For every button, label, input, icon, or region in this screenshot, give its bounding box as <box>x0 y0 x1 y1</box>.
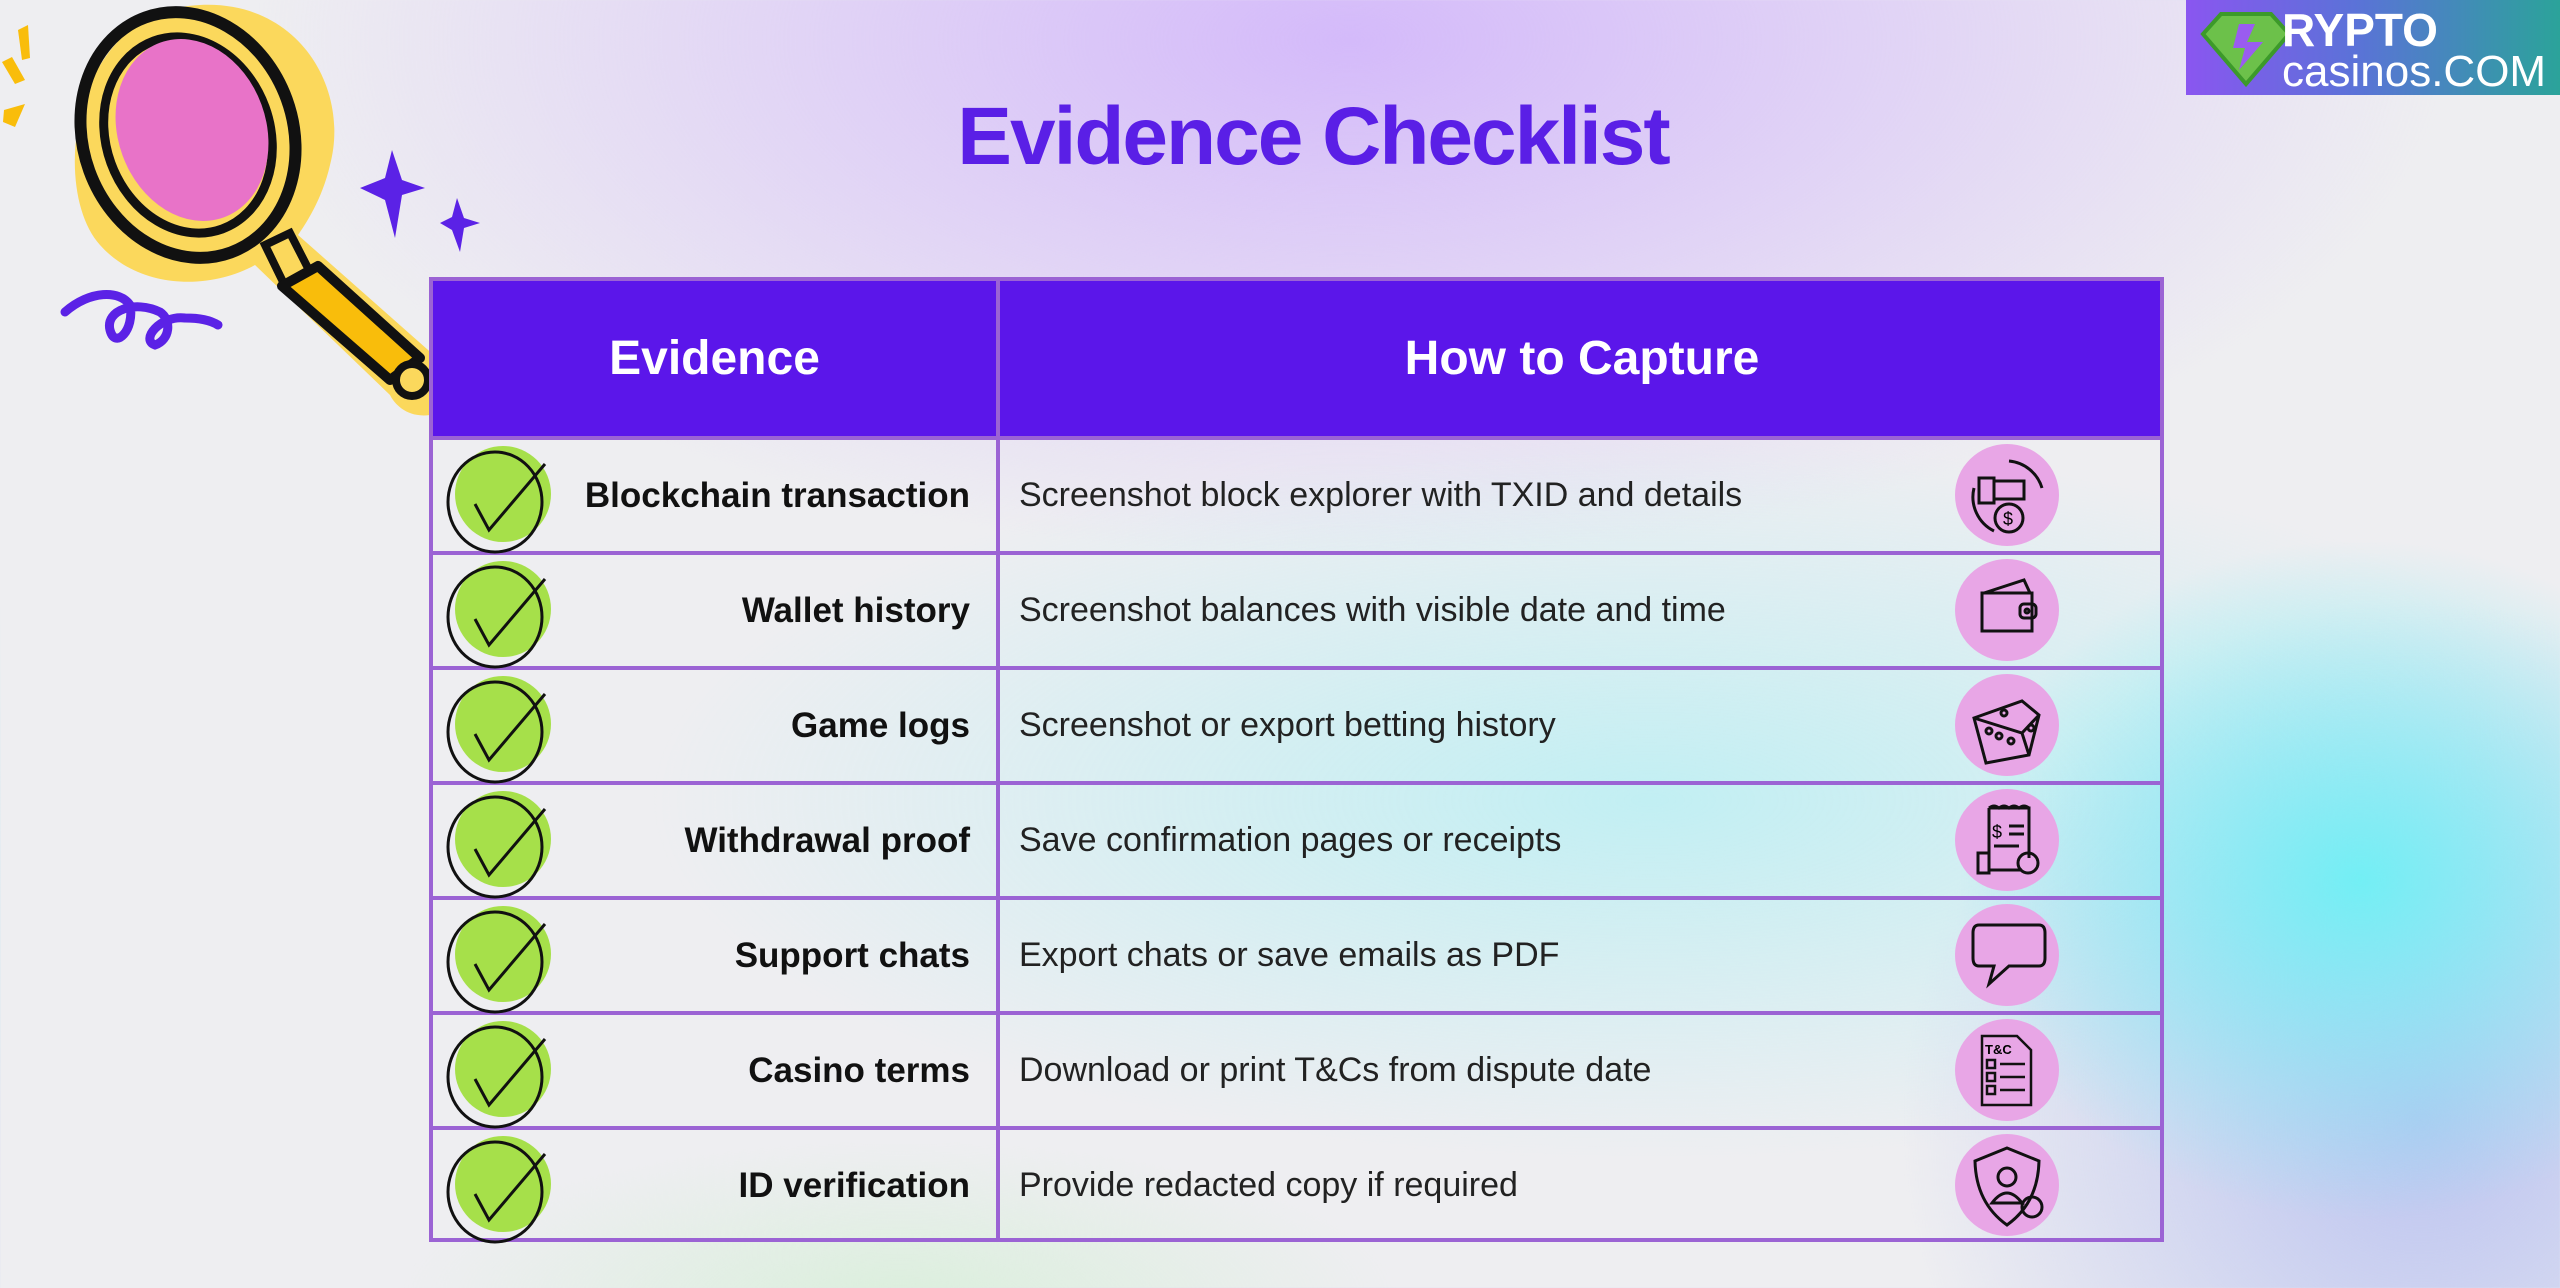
row: id verification <box>446 1134 2059 1244</box>
row: game logs <box>433 670 2160 785</box>
row: support chats: Export chats or save emails as PDF <box>1019 936 1559 974</box>
logo <box>2186 0 2560 95</box>
logo: casinos.COM <box>2282 47 2546 95</box>
row: support chats: Support chats <box>735 936 970 975</box>
row: blockchain: $ <box>2003 509 2013 529</box>
row: support chats <box>433 900 2160 1015</box>
decoration: squiggle <box>65 295 218 345</box>
row: wallet: Wallet history <box>742 591 970 630</box>
icon: logo diamond <box>2203 14 2289 84</box>
row: casino terms: Casino terms <box>748 1051 970 1090</box>
row: withdrawal: $ <box>1992 822 2002 842</box>
row: game logs: Screenshot or export betting history <box>1019 706 1556 744</box>
row: wallet: Screenshot balances with visible date and time <box>1019 591 1726 629</box>
row: blockchain: Screenshot block explorer with TXID and details <box>1019 476 1742 514</box>
illustration: magnifying glass <box>2 4 480 416</box>
row: blockchain: Blockchain transaction <box>585 476 970 515</box>
row: id verification: ID verification <box>739 1166 970 1205</box>
row: withdrawal <box>433 785 2160 900</box>
icon: sparkles <box>360 150 480 252</box>
table header: How to Capture <box>1405 332 1759 385</box>
row: game logs: Game logs <box>791 706 970 745</box>
row: casino terms: Download or print T&Cs from dispute date <box>1019 1051 1651 1089</box>
title: Evidence Checklist <box>957 91 1669 182</box>
row: casino terms <box>433 1015 2160 1130</box>
decoration: burst lines <box>2 25 30 127</box>
logo: RYPTO <box>2282 4 2438 56</box>
row: id verification: Provide redacted copy if required <box>1019 1166 1518 1204</box>
table header: Evidence <box>609 332 820 385</box>
row: withdrawal: Withdrawal proof <box>684 821 970 860</box>
table: evidence checklist <box>429 277 2164 1242</box>
table header <box>433 281 2160 440</box>
row: wallet <box>433 555 2160 670</box>
row: blockchain <box>433 440 2160 555</box>
row: casino terms: T&C <box>1985 1042 2012 1057</box>
row: withdrawal: Save confirmation pages or receipts <box>1019 821 1561 859</box>
